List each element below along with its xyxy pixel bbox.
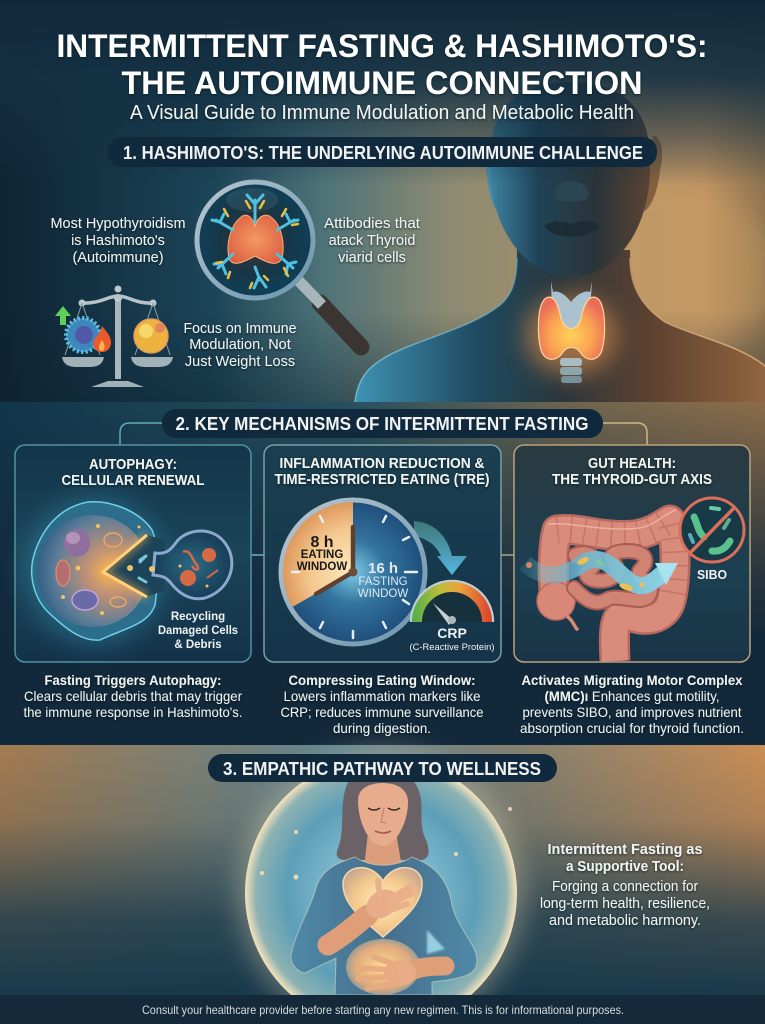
icon: 16:8 clock xyxy=(281,500,425,644)
panel: autophagy card xyxy=(15,445,251,662)
glowing heart xyxy=(343,868,422,937)
text: most hypothyroidism xyxy=(50,216,186,266)
card title xyxy=(274,455,490,488)
text: antibodies: atack Thyroid xyxy=(329,233,415,249)
card title: CELLULAR RENEWAL xyxy=(62,472,204,489)
fasting window label: 16 h xyxy=(368,560,398,577)
card title xyxy=(552,455,712,488)
heading: section 2 xyxy=(162,409,603,438)
eating window label: WINDOW xyxy=(297,561,347,573)
card title: INFLAMMATION REDUCTION & xyxy=(280,455,485,472)
fasting window label xyxy=(358,560,408,600)
panel: gut health card xyxy=(514,445,750,662)
heading: section 1: 1. HASHIMOTO'S: THE UNDERLYING AUTOIMMUNE CHALLENGE xyxy=(123,142,643,163)
vesicle with debris xyxy=(153,531,232,599)
hand on heart xyxy=(328,881,412,945)
antibodies xyxy=(212,195,298,288)
text: most hypothyroidism: Most Hypothyroidism xyxy=(50,216,186,232)
icon: cell engulfing debris xyxy=(23,496,232,646)
label: recycling damaged cells xyxy=(158,611,238,651)
text: immune modulation focus: Just Weight Loss xyxy=(185,354,295,370)
text: immune modulation focus: Focus on Immune xyxy=(184,321,296,337)
panel: inflammation reduction card xyxy=(264,445,501,662)
text: autophagy description: Fasting Triggers Autophagy: xyxy=(44,672,222,688)
label: recycling damaged cells: Recycling xyxy=(171,611,225,623)
panel: footer disclaimer xyxy=(0,995,765,1024)
text: gut health description: prevents SIBO, and improves nutrient xyxy=(522,704,742,720)
face xyxy=(358,783,408,846)
icon: balance scale with immune cell and fat cell xyxy=(55,286,173,387)
eating window label xyxy=(297,534,347,573)
text: gut health description: (MMC)ı Enhances gut motility, xyxy=(544,688,720,704)
text: gut health description xyxy=(520,672,744,736)
subtitle: A Visual Guide to Immune Modulation and Metabolic Health xyxy=(130,102,634,124)
fasting window label: FASTING xyxy=(358,576,408,588)
text: time-restricted eating description: CRP; reduces immune surveillance xyxy=(280,704,484,720)
text: supportive tool: and metabolic harmony. xyxy=(549,913,701,929)
face xyxy=(490,82,650,277)
hair xyxy=(337,782,429,860)
ears xyxy=(482,138,500,212)
panel: section 3 wellness background and illustration xyxy=(0,745,765,1024)
panel: footer disclaimer: Consult your healthcare provider before starting any new regimen. This is for informational purposes. xyxy=(142,1003,624,1017)
icon: intestines xyxy=(537,510,676,661)
text: antibodies: viarid cells xyxy=(338,250,406,266)
title: INTERMITTENT FASTING & HASHIMOTO'S: xyxy=(56,28,708,64)
card title: TIME-RESTRICTED EATING (TRE) xyxy=(274,471,490,488)
small intestine xyxy=(574,551,651,602)
text: most hypothyroidism: is Hashimoto's xyxy=(71,233,165,249)
fat cell xyxy=(134,319,168,353)
text: supportive tool: Intermittent Fasting as xyxy=(548,842,702,858)
card title: AUTOPHAGY: xyxy=(89,456,177,473)
text: antibodies: Attibodies that xyxy=(324,216,420,232)
text: supportive tool: Forging a connection for xyxy=(552,879,698,895)
immune cell xyxy=(66,318,100,352)
text: autophagy description xyxy=(24,672,242,720)
text: most hypothyroidism: (Autoimmune) xyxy=(72,250,164,266)
flame xyxy=(93,326,111,352)
icon: no SIBO bacteria xyxy=(680,498,744,562)
eating window label: 8 h xyxy=(310,534,334,551)
neck xyxy=(364,832,402,868)
thyroid gland xyxy=(538,297,605,359)
text: immune modulation focus: Modulation, Not xyxy=(189,337,291,353)
glowing gut circle xyxy=(346,939,420,995)
label: CRP: (C-Reactive Protein) xyxy=(410,642,494,652)
thyroid cartilage xyxy=(551,281,592,328)
fasting window label: WINDOW xyxy=(358,588,408,600)
card title: GUT HEALTH: xyxy=(588,455,676,472)
text: time-restricted eating description: during digestion. xyxy=(333,720,431,736)
gauge: CRP xyxy=(411,581,493,625)
label: CRP xyxy=(410,625,494,652)
trachea rings xyxy=(560,358,582,383)
text: gut health description: Activates Migrating Motor Complex xyxy=(522,672,743,688)
heading: section 3: 3. EMPATHIC PATHWAY TO WELLNESS xyxy=(223,758,541,779)
text: autophagy description: Clears cellular debris that may trigger xyxy=(24,688,242,704)
label: recycling damaged cells: Damaged Cells xyxy=(158,625,238,637)
text: supportive tool xyxy=(540,842,710,929)
gap between arm and torso xyxy=(427,930,445,954)
text: time-restricted eating description: Compressing Eating Window: xyxy=(288,672,476,688)
arrow: gut motility flow xyxy=(525,556,678,592)
text: autophagy description: the immune response in Hashimoto's. xyxy=(24,704,242,720)
panel: top fade behind title xyxy=(0,0,765,185)
heading: section 1 xyxy=(108,137,657,167)
body xyxy=(355,250,765,402)
icon: magnifying glass over thyroid with antibodies xyxy=(197,182,361,347)
card title xyxy=(62,456,204,489)
text: gut health description: absorption crucial for thyroid function. xyxy=(520,720,744,736)
illustration: woman in glowing sphere xyxy=(236,748,526,1024)
hand on belly xyxy=(358,957,445,989)
card title: THE THYROID-GUT AXIS xyxy=(552,471,712,488)
label: SIBO: SIBO xyxy=(697,567,727,582)
green arrow up xyxy=(55,306,71,325)
illustration: head, neck and shoulders with thyroid xyxy=(355,82,765,402)
panel: section 1 Hashimoto's background and illustrations xyxy=(0,0,765,402)
label: recycling damaged cells: & Debris xyxy=(174,639,222,651)
text: time-restricted eating description xyxy=(280,672,484,736)
arrow: curved down to CRP xyxy=(414,521,467,575)
title: THE AUTOIMMUNE CONNECTION xyxy=(122,65,642,101)
text: supportive tool: a Supportive Tool: xyxy=(566,859,684,875)
text: time-restricted eating description: Lowers inflammation markers like xyxy=(284,688,481,704)
panel: section 2 key mechanisms background xyxy=(0,402,765,745)
eating window label: EATING xyxy=(301,549,343,561)
text: immune modulation focus xyxy=(184,321,296,370)
text: supportive tool: long-term health, resilience, xyxy=(540,896,710,912)
heading: section 2: 2. KEY MECHANISMS OF INTERMITTENT FASTING xyxy=(176,413,588,434)
text: antibodies xyxy=(324,216,420,266)
title xyxy=(56,28,708,101)
sweater xyxy=(291,857,477,995)
label: CRP: CRP xyxy=(437,625,467,641)
